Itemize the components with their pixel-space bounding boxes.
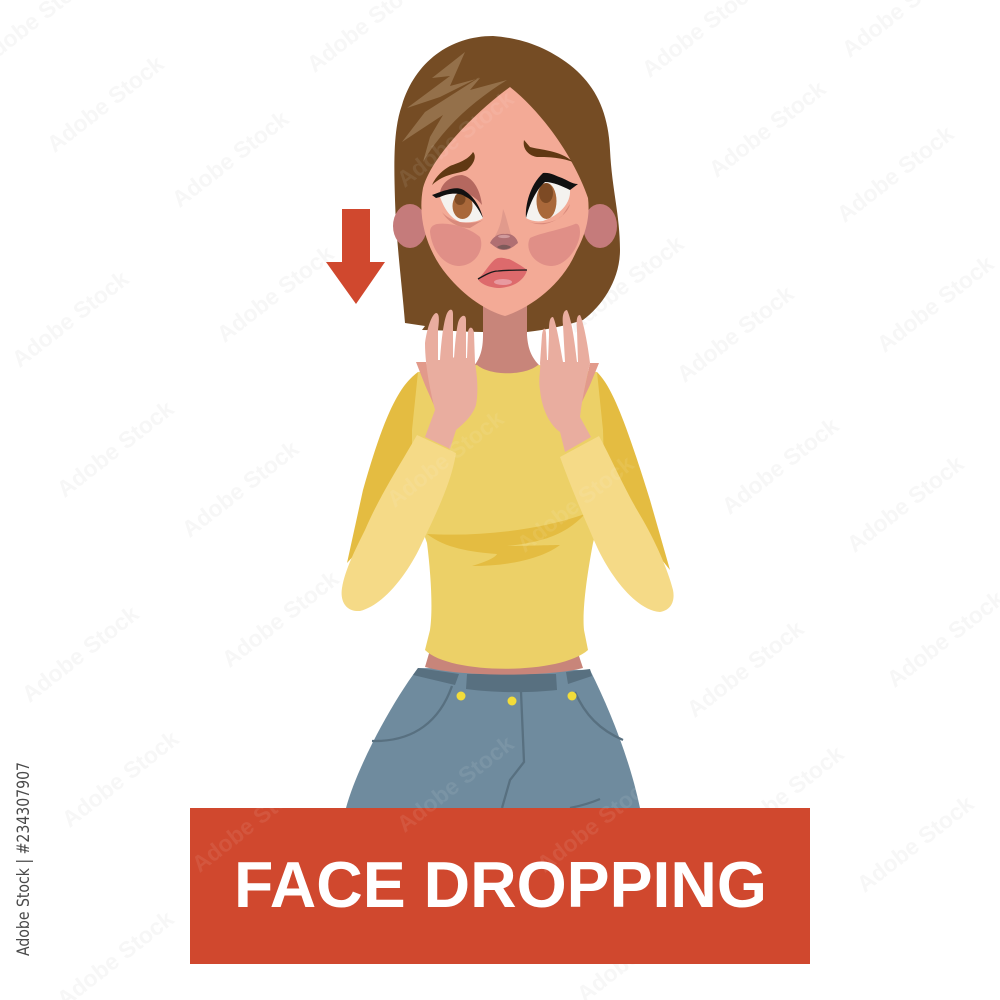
watermark overlay on figure xyxy=(187,85,659,877)
fold xyxy=(427,514,585,566)
watermark pattern: Adobe Stock xyxy=(832,120,959,227)
cheeks xyxy=(430,224,481,266)
watermark pattern: Adobe Stock xyxy=(212,240,339,347)
figure: woman xyxy=(342,36,674,808)
watermark pattern: Adobe Stock xyxy=(704,75,831,182)
pockets and seam xyxy=(372,686,623,808)
watermark overlay on figure: Adobe Stock xyxy=(532,770,659,877)
watermark overlay on figure: Adobe Stock xyxy=(392,730,519,837)
hair xyxy=(394,36,620,332)
face xyxy=(421,87,589,316)
watermark pattern: Adobe Stock xyxy=(872,250,999,357)
watermark pattern: Adobe Stock xyxy=(217,565,344,672)
watermark pattern: Adobe Stock xyxy=(42,50,169,157)
watermark pattern: Adobe Stock xyxy=(17,600,144,707)
watermark pattern: Adobe Stock xyxy=(562,230,689,337)
mouth xyxy=(478,258,527,288)
nose xyxy=(490,209,518,250)
watermark pattern: Adobe Stock xyxy=(52,395,179,502)
left eye xyxy=(432,175,483,228)
watermark overlay on figure: Adobe Stock xyxy=(382,405,509,512)
watermark pattern: Adobe Stock xyxy=(167,105,294,212)
banner xyxy=(190,808,810,964)
neck xyxy=(474,300,540,380)
eyebrows xyxy=(432,152,475,185)
right eye xyxy=(526,173,578,224)
sweater xyxy=(342,365,674,669)
banner title: FACE DROPPING xyxy=(234,848,767,921)
left hand xyxy=(416,310,477,449)
hair highlight xyxy=(402,52,507,162)
right hand xyxy=(539,310,599,452)
torso xyxy=(412,365,605,669)
watermark pattern: Adobe Stock xyxy=(177,435,304,542)
watermark pattern: Adobe Stock xyxy=(852,790,979,897)
front sleeves xyxy=(342,435,456,611)
back sleeves xyxy=(347,372,432,563)
watermark pattern: Adobe Stock xyxy=(722,740,849,847)
watermark pattern: Adobe Stock xyxy=(672,280,799,387)
watermark pattern: Adobe Stock xyxy=(682,615,809,722)
midriff skin xyxy=(425,650,583,675)
watermark overlay on figure: Adobe Stock xyxy=(392,85,519,192)
watermark pattern: Adobe Stock xyxy=(717,412,844,519)
watermark overlay on figure: Adobe Stock xyxy=(512,450,639,557)
waistband xyxy=(413,668,592,692)
buttons xyxy=(456,692,576,706)
icon: down arrow xyxy=(326,209,385,304)
watermark overlay on figure: Adobe Stock xyxy=(187,770,314,877)
ears xyxy=(393,204,617,248)
stock id text: Adobe Stock | #234307907 xyxy=(14,762,34,956)
jeans xyxy=(346,668,640,808)
watermark pattern: Adobe Stock xyxy=(57,725,184,832)
watermark pattern: Adobe Stock xyxy=(7,265,134,372)
watermark pattern: Adobe Stock xyxy=(842,450,969,557)
